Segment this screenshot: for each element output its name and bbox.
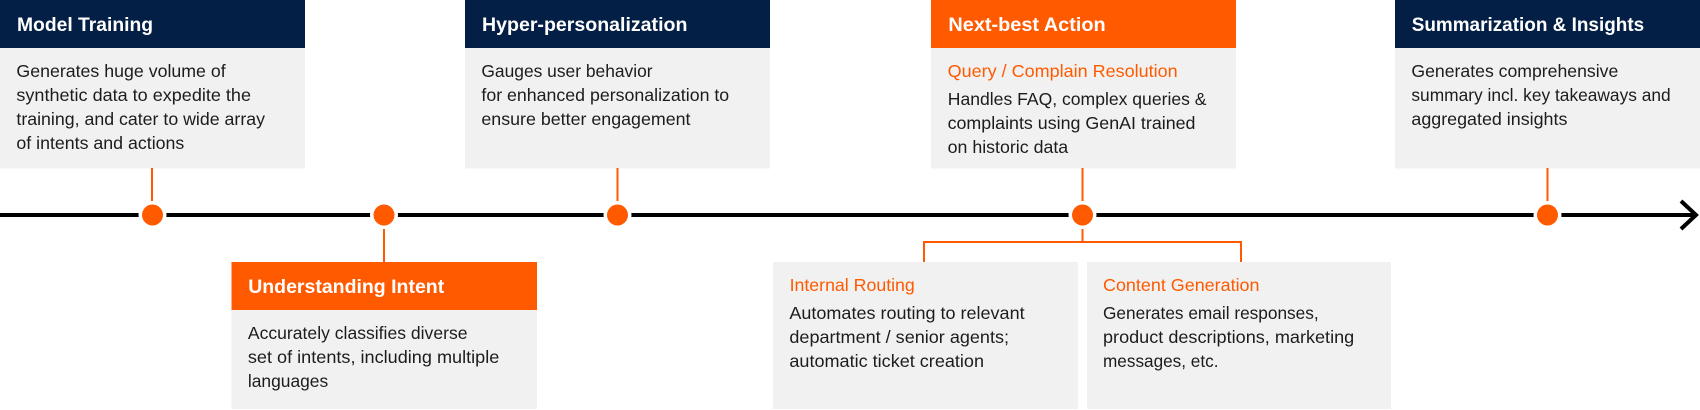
text: hyper-personalization description: Gauges user behavior [481,61,653,81]
text: understanding intent description: set of intents, including multiple [248,347,499,367]
subheading: internal routing: Internal Routing [790,275,915,295]
text: content generation description: messages, etc. [1103,351,1218,371]
text: summarization description: Generates comprehensive [1411,61,1618,81]
heading: summarization and insights [1395,0,1700,48]
text: model training description: Generates huge volume of [16,61,226,81]
text: query resolution description: on historic data [948,137,1068,157]
panel: content generation [1087,262,1391,409]
heading: model training [0,0,305,48]
text: model training description: synthetic data to expedite the [16,85,251,105]
heading: next-best action [931,0,1236,48]
panel: internal routing [773,262,1078,409]
text: understanding intent description [248,323,499,391]
text: hyper-personalization description: for enhanced personalization to [481,85,729,105]
connector and marker: summarization and insights [1534,168,1562,229]
subheading: query / complain resolution: Query / Complain Resolution [948,61,1178,81]
text: model training description: of intents and actions [16,133,185,153]
panel: next-best action [931,0,1236,168]
text: understanding intent description: Accurately classifies diverse [248,323,468,343]
panel: hyper-personalization [465,0,770,168]
heading: hyper-personalization [465,0,770,48]
heading: model training: Model Training [17,14,153,36]
text: hyper-personalization description: ensure better engagement [481,109,691,129]
text: query resolution description [948,89,1207,157]
heading: understanding intent [232,262,537,310]
text: query resolution description: complaints using GenAI trained [948,113,1196,133]
text: hyper-personalization description [481,61,729,129]
connector and marker: understanding intent [370,201,398,262]
timeline arrow [0,201,1696,229]
text: summarization description [1411,61,1671,129]
heading: understanding intent: Understanding Intent [248,276,445,298]
panel: model training [0,0,305,168]
text: content generation description: Generates email responses, [1103,303,1319,323]
text: summarization description: aggregated insights [1411,109,1568,129]
heading: hyper-personalization: Hyper-personalization [482,14,687,36]
panel: summarization and insights [1395,0,1700,168]
text: model training description [16,61,265,153]
text: content generation description [1103,303,1354,371]
text: summarization description: summary incl. key takeaways and [1411,85,1671,105]
heading: summarization and insights: Summarization & Insights [1412,14,1644,36]
subheading: content generation: Content Generation [1103,275,1260,295]
text: internal routing description: automatic ticket creation [789,351,984,371]
heading: next-best action: Next-best Action [948,14,1106,36]
text: internal routing description: Automates routing to relevant [789,303,1025,323]
panel: understanding intent [232,262,537,409]
connector and marker: hyper-personalization [604,168,632,229]
text: internal routing description [789,303,1025,371]
text: query resolution description: Handles FAQ, complex queries & [948,89,1207,109]
connector, marker and bracket: next-best action [924,168,1241,262]
text: model training description: training, and cater to wide array [16,109,265,129]
text: content generation description: product descriptions, marketing [1103,327,1354,347]
text: internal routing description: department / senior agents; [789,327,1009,347]
text: understanding intent description: languages [248,371,328,391]
connector and marker: model training [138,168,166,229]
